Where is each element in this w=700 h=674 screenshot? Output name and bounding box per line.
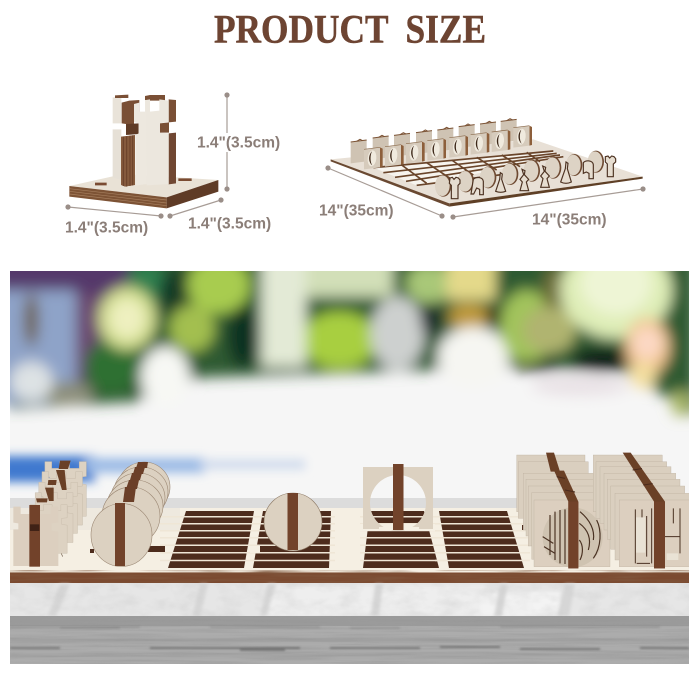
board top surface — [10, 508, 689, 573]
slot block 2 — [250, 511, 335, 568]
back row front pieces — [364, 126, 532, 169]
label: height: 1.4"(3.5cm) — [197, 134, 280, 152]
label: right side: 14"(35cm) — [532, 212, 607, 228]
icon: rook base — [69, 174, 218, 208]
blurred garden background — [10, 271, 689, 426]
square pieces group with round cut-out — [517, 453, 610, 568]
label: right width: 1.4"(3.5cm) — [188, 216, 271, 232]
front row pawns — [449, 156, 616, 199]
square pieces group with rook cut-out — [593, 453, 691, 568]
rook size diagram — [65, 92, 280, 237]
chess board size diagram — [319, 119, 646, 228]
back row pieces — [351, 119, 517, 163]
disc piece on middle — [264, 493, 322, 551]
dimension: right side — [450, 186, 646, 220]
front row discs — [435, 151, 604, 197]
panel: lifestyle photo — [0, 242, 696, 664]
slot block 3 — [360, 511, 445, 568]
disc pieces stack — [91, 462, 170, 566]
dimension: right width — [167, 197, 224, 219]
concrete table front — [10, 583, 689, 616]
grey wood shelf — [10, 616, 689, 664]
label: left width: 1.4"(3.5cm) — [65, 220, 148, 236]
rook pieces stack — [13, 461, 86, 567]
title: PRODUCT SIZE — [214, 6, 486, 52]
ring square piece — [363, 464, 433, 531]
dimension: left width — [65, 204, 164, 219]
board front edge — [10, 572, 689, 583]
icon: rook piece — [113, 95, 176, 187]
slot block 1 — [160, 511, 260, 568]
icon: assembled chess board — [331, 119, 643, 207]
table horizon band — [10, 498, 516, 508]
dimension: height — [224, 92, 230, 192]
slot fragments — [90, 525, 564, 553]
dimension: left side — [325, 165, 445, 219]
blue blurred strip — [0, 456, 305, 482]
slot block 4 — [435, 511, 530, 568]
label: left side: 14"(35cm) — [319, 202, 394, 220]
